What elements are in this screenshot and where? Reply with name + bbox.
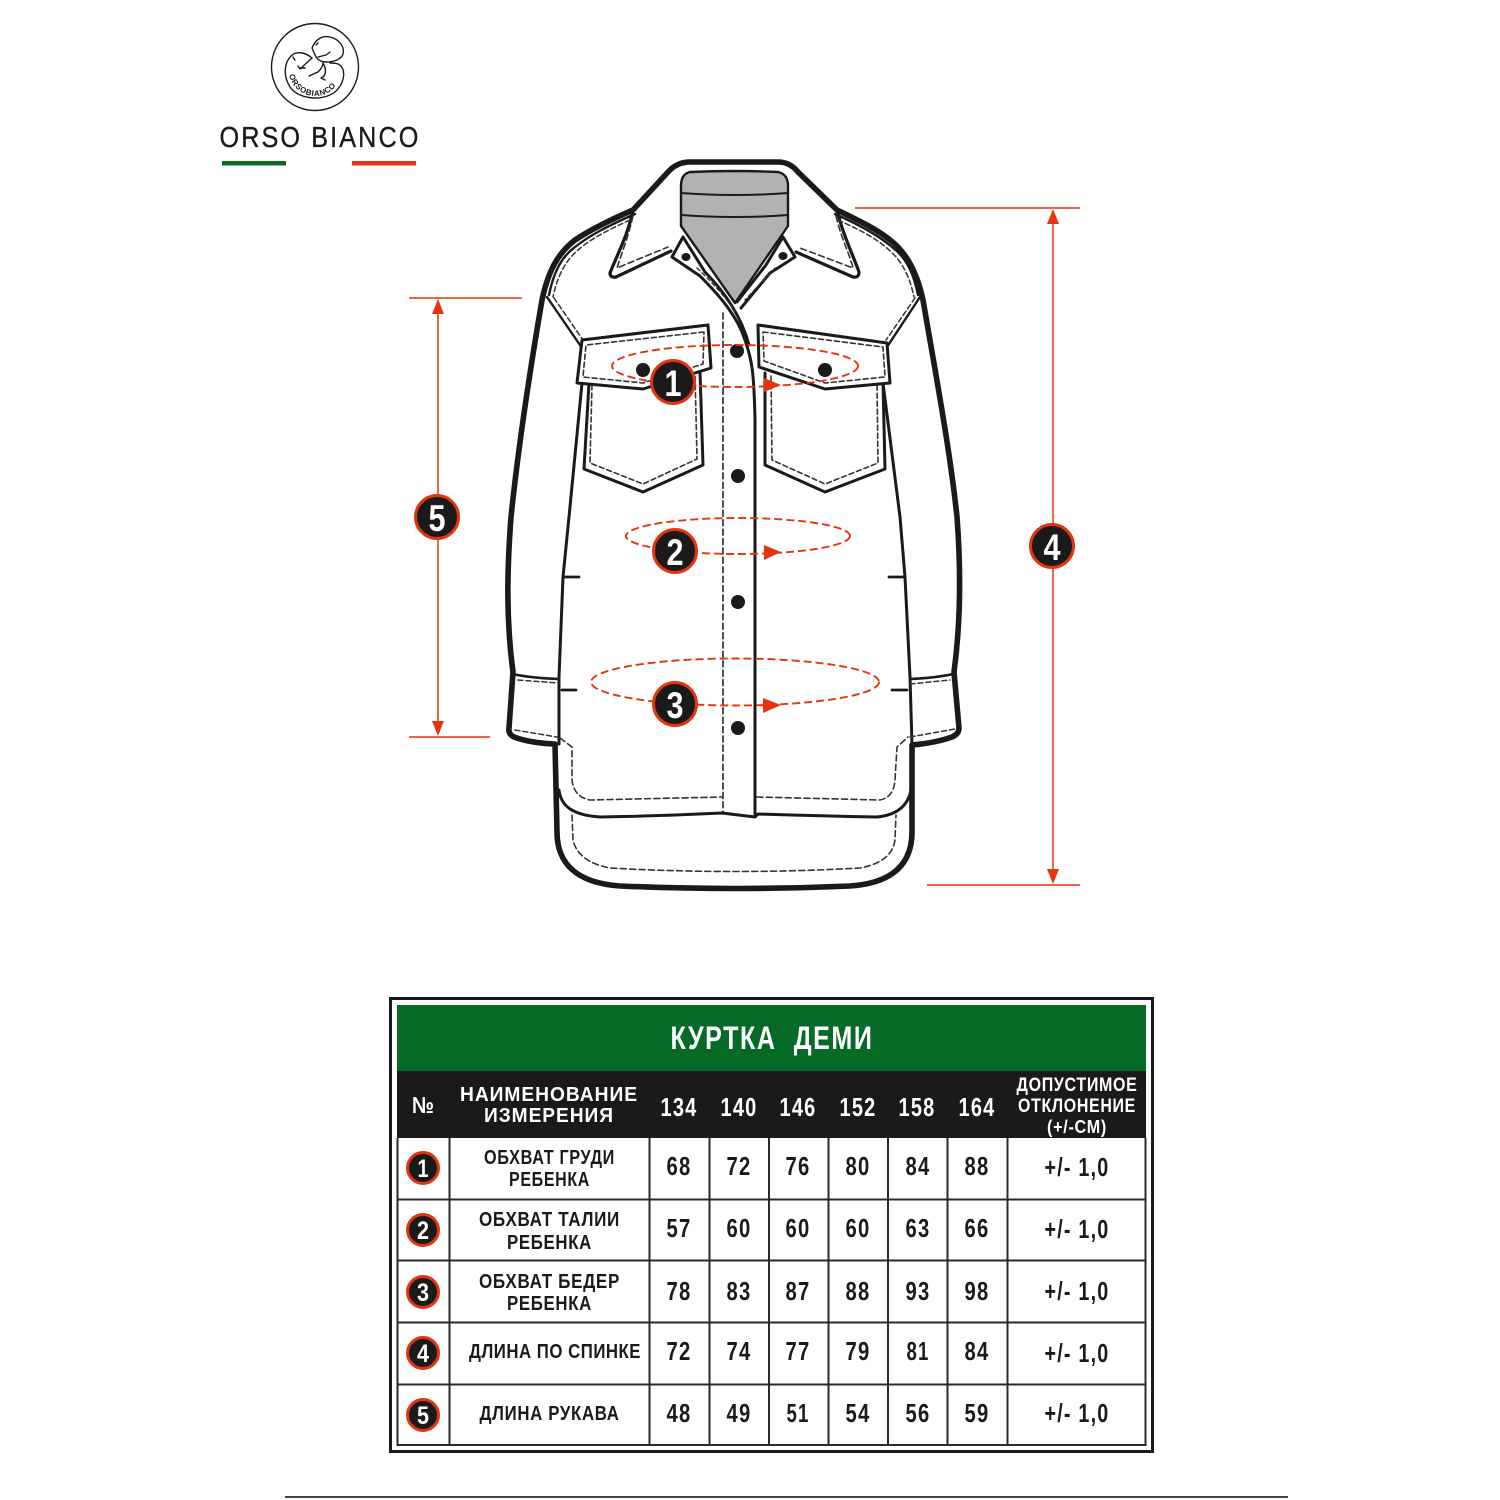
row 3: hips: 88	[846, 1276, 870, 1306]
right pocket	[758, 325, 890, 492]
table title band: КУРТКА ДЕМИ	[670, 1020, 874, 1056]
row 1: chest: РЕБЕНКА	[509, 1169, 590, 1191]
row 2: waist: 57	[666, 1213, 692, 1243]
flag stripes	[222, 161, 416, 166]
front hem	[559, 790, 911, 817]
row 5: sleeve length: ДЛИНА РУКАВА	[480, 1403, 620, 1425]
row 2: waist: 60	[846, 1213, 870, 1243]
measurement 2: waist loop: 2	[666, 532, 684, 573]
table header row: 134	[660, 1092, 698, 1122]
row 2: waist: 60	[786, 1213, 810, 1243]
row 3: hips: РЕБЕНКА	[507, 1293, 592, 1315]
measurement 5: sleeve length arrow: 5	[428, 498, 446, 539]
row 5: sleeve length: 56	[906, 1398, 930, 1428]
measurement 2: waist loop	[626, 518, 850, 573]
row 5: sleeve length: 54	[846, 1398, 870, 1428]
row 3: hips	[408, 1271, 1110, 1315]
row 2: waist: 2	[417, 1217, 429, 1245]
row 2: waist: 60	[726, 1213, 752, 1243]
row 2: waist: РЕБЕНКА	[507, 1232, 592, 1254]
jacket outline	[508, 162, 960, 888]
row 3: hips: 93	[906, 1276, 930, 1306]
measurement 5: sleeve length arrow	[409, 298, 522, 737]
row 4: back length	[408, 1336, 1110, 1368]
row 1: chest: 1	[418, 1155, 429, 1183]
row 2: waist: ОБХВАТ ТАЛИИ	[479, 1209, 620, 1231]
row 3: hips: 87	[786, 1276, 810, 1306]
table frame	[390, 998, 1152, 1452]
row 1: chest: ОБХВАТ ГРУДИ	[484, 1147, 615, 1169]
bottom rule	[285, 1496, 1288, 1498]
row 1: chest: 76	[786, 1151, 810, 1181]
table header row: №	[412, 1092, 434, 1118]
collar stitching	[617, 216, 853, 268]
icon: bear emblem	[272, 24, 358, 110]
table header row: 164	[958, 1092, 996, 1122]
shoulder seams	[547, 214, 920, 348]
row 5: sleeve length: 59	[964, 1398, 990, 1428]
row 2: waist: 66	[964, 1213, 990, 1243]
table header row: 158	[898, 1092, 936, 1122]
row 4: back length: 72	[666, 1336, 692, 1366]
row 3: hips: +/- 1,0	[1044, 1276, 1110, 1306]
measurement 4: back length arrow	[855, 208, 1080, 885]
logo: Orso Bianco: ORSOBIANCO	[290, 74, 335, 96]
table header row: 146	[780, 1092, 816, 1122]
row 3: hips: 98	[964, 1276, 990, 1306]
lapels and placket	[672, 237, 795, 816]
row 5: sleeve length: 48	[666, 1398, 692, 1428]
row 4: back length: 77	[786, 1336, 810, 1366]
neck lining	[681, 171, 788, 303]
lapel stitching	[697, 268, 775, 312]
hem stitching	[560, 737, 908, 872]
measurement 3: hip loop: 3	[666, 685, 684, 726]
measurement 3: hip loop	[591, 658, 879, 726]
row 1: chest: 72	[726, 1151, 752, 1181]
row 2: waist	[408, 1209, 1110, 1254]
row 4: back length: 79	[846, 1336, 870, 1366]
table header row	[397, 1071, 1146, 1138]
brand name: ORSO BIANCO	[220, 120, 420, 153]
row 1: chest: 84	[906, 1151, 930, 1181]
cuffs	[513, 674, 955, 737]
left pocket	[577, 325, 711, 492]
body side lines	[559, 383, 912, 745]
row 1: chest: 68	[666, 1151, 692, 1181]
row 1: chest	[408, 1147, 1110, 1191]
row 5: sleeve length: +/- 1,0	[1044, 1398, 1110, 1428]
jacket drawing	[508, 162, 960, 888]
row 2: waist: 63	[906, 1213, 930, 1243]
table header row: ДОПУСТИМОЕ	[1016, 1075, 1138, 1096]
placket stitching	[722, 313, 724, 813]
table header row: 140	[720, 1092, 758, 1122]
side seams and pocket slits	[562, 577, 907, 690]
row 5: sleeve length: 51	[786, 1398, 810, 1428]
row 3: hips: 83	[726, 1276, 752, 1306]
shoulder stitching	[553, 220, 915, 340]
measurement 1: chest loop: 1	[664, 363, 682, 404]
row 5: sleeve length	[408, 1398, 1110, 1430]
size table	[390, 998, 1152, 1452]
row 5: sleeve length: 5	[417, 1402, 429, 1430]
row 4: back length: ДЛИНА ПО СПИНКЕ	[469, 1341, 641, 1363]
logo: Orso Bianco	[220, 22, 420, 166]
table title band	[397, 1005, 1146, 1071]
collar snaps	[682, 253, 787, 260]
row 3: hips: 3	[417, 1279, 429, 1307]
measurement 4: back length arrow: 4	[1044, 527, 1061, 568]
row 4: back length: 84	[964, 1336, 990, 1366]
row 4: back length: 81	[906, 1336, 930, 1366]
table header row: ИЗМЕРЕНИЯ	[484, 1105, 614, 1127]
row 4: back length: 4	[417, 1340, 429, 1368]
measurement 1: chest loop	[612, 345, 858, 404]
row 1: chest: 80	[846, 1151, 870, 1181]
row 2: waist: +/- 1,0	[1044, 1214, 1110, 1244]
table header row: (+/-СМ)	[1047, 1117, 1107, 1137]
collar	[610, 210, 859, 277]
row 1: chest: 88	[964, 1151, 990, 1181]
row 5: sleeve length: 49	[726, 1398, 752, 1428]
table header row: НАИМЕНОВАНИЕ	[460, 1084, 638, 1106]
row 1: chest: +/- 1,0	[1044, 1152, 1110, 1182]
table header row: ОТКЛОНЕНИЕ	[1018, 1096, 1136, 1117]
row 3: hips: 78	[666, 1276, 692, 1306]
table grid	[397, 1138, 1146, 1445]
table header row: 152	[840, 1092, 876, 1122]
row 4: back length: +/- 1,0	[1044, 1338, 1110, 1368]
row 3: hips: ОБХВАТ БЕДЕР	[479, 1271, 620, 1293]
row 4: back length: 74	[726, 1336, 752, 1366]
buttons	[636, 344, 832, 735]
